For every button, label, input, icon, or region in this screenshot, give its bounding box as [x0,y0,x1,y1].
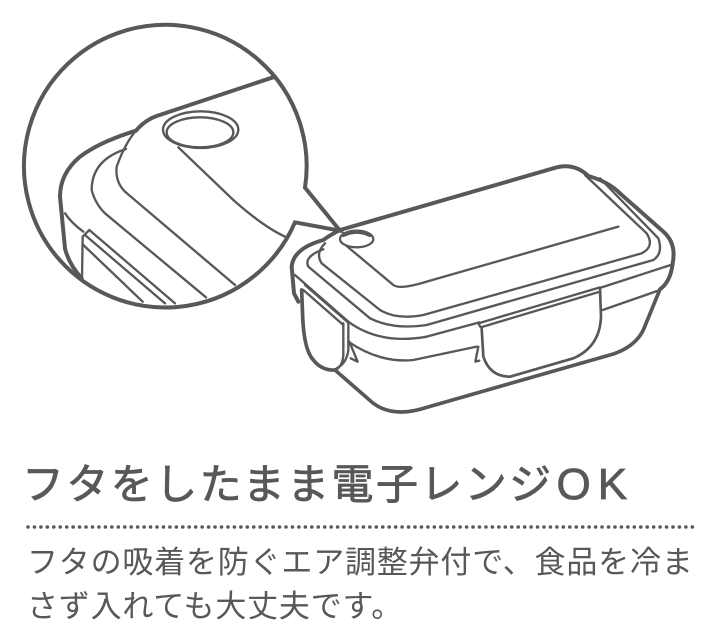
callout outline [24,25,340,307]
description text: フタの吸着を防ぐエア調整弁付で、食品を冷ま [27,545,694,580]
magnified callout circle [24,25,340,307]
description text: さず入れても大丈夫です。 [27,589,403,624]
magnified lid contours [116,131,235,285]
title: フタをしたまま電子レンジOK [22,460,634,509]
description text [27,545,694,624]
magnified clip [83,230,175,303]
box body outline [335,289,660,412]
magnified lid edge [60,77,275,278]
box rim lines [348,342,477,360]
magnified vent valve [163,111,238,148]
lid inner contours [347,227,618,287]
right clip [482,288,601,377]
lunch box [292,166,674,412]
lid outline [340,166,674,289]
vent valve [340,231,373,247]
left clip [302,290,335,370]
